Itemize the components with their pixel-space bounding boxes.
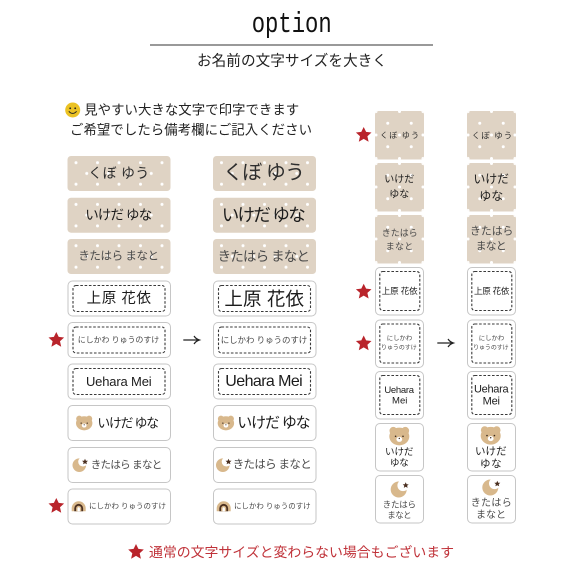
square: kubo yuu [375,111,424,160]
square: kitahara manato [375,215,424,264]
label: ikeda yuna large: いけだ ゆな [222,205,306,225]
square: Uehara Mei: Mei [392,396,407,406]
square: moon kitahara manato large: まなと [476,509,506,521]
star: rectangular row 5 [48,332,64,347]
label: nishikawa ryuunosuke: にしかわ りゅうのすけ [78,336,159,344]
square: Uehara Mei large: Mei [483,396,500,408]
label: rainbow nishikawa ryuunosuke: にしかわ りゅうのすけ [89,502,166,510]
square: kubo yuu large [467,111,516,160]
label: bear ikeda yuna large: いけだ ゆな [237,414,311,432]
square: uehara kai large: 上原 花依 [474,286,510,296]
label: ikeda yuna: いけだ ゆな [85,207,152,222]
label: uehara kai [68,281,170,316]
title: option [252,8,332,41]
instruction text: 見やすい大きな文字で印字できます [84,102,299,118]
square: nishikawa ryuunosuke large: りゅうのすけ [473,344,509,351]
label: bear ikeda yuna [68,406,170,440]
square: moon kitahara manato: きたはら [383,499,416,509]
square: kubo yuu: くぼ ゆう [380,131,419,140]
label: bear ikeda yuna large [214,406,316,440]
square: bear ikeda yuna large: ゆな [480,458,502,470]
square: Uehara Mei large: Uehara [474,383,510,395]
label: kitahara manato large: きたはら まなと [218,249,310,264]
panel: square labels, normal size [375,111,424,523]
label: moon kitahara manato large [214,448,316,482]
square: nishikawa ryuunosuke large [468,320,516,368]
label: nishikawa ryuunosuke [68,322,170,358]
square: bear ikeda yuna: ゆな [390,458,409,469]
label: ikeda yuna [68,198,170,233]
square: moon kitahara manato [376,476,424,523]
label: nishikawa ryuunosuke large: にしかわ りゅうのすけ [221,335,307,345]
subtitle: お名前の文字サイズを大きく [197,52,387,70]
square: kitahara manato: まなと [386,242,413,252]
panel: rectangular labels, normal size [68,156,170,524]
label: kitahara manato large [213,239,316,274]
square: bear ikeda yuna: いけだ [385,447,414,458]
label: rainbow nishikawa ryuunosuke large [214,489,316,524]
star: rectangular row 9 [48,498,64,513]
icon: smiley [65,102,80,118]
square: kitahara manato large [467,215,516,264]
label: Uehara Mei: Uehara Mei [86,374,152,389]
square: ikeda yuna: いけだ [384,174,414,186]
square: moon kitahara manato: まなと [387,510,412,520]
square: Uehara Mei [376,372,424,419]
star: square row 4 [356,284,372,298]
label: kubo yuu large [213,156,316,191]
label: Uehara Mei [68,364,170,399]
square: Uehara Mei: Uehara [384,385,415,396]
label: uehara kai: 上原 花依 [87,290,151,307]
square: ikeda yuna large [467,163,516,212]
square: nishikawa ryuunosuke: りゅうのすけ [381,344,417,351]
label: bear ikeda yuna: いけだ ゆな [97,416,159,430]
label: kubo yuu: くぼ ゆう [88,165,149,181]
label: Uehara Mei large: Uehara Mei [225,373,303,390]
instruction text [70,102,312,138]
square: nishikawa ryuunosuke large: にしかわ [479,334,504,342]
square: ikeda yuna large: ゆな [479,189,503,203]
square: kitahara manato large: きたはら [470,225,513,238]
label: ikeda yuna large [213,198,316,233]
label: kubo yuu large: くぼ ゆう [223,161,305,184]
panel: square labels, large size [467,111,516,523]
label: kitahara manato: きたはら まなと [78,250,159,263]
square: moon kitahara manato large: きたはら [471,497,512,509]
label: moon kitahara manato: きたはら まなと [91,459,162,471]
square: bear ikeda yuna [376,424,424,471]
label: rainbow nishikawa ryuunosuke [68,489,170,524]
instruction text: ご希望でしたら備考欄にご記入ください [70,122,312,138]
star: square row 5 [356,336,372,350]
label: uehara kai large: 上原 花依 [224,288,305,310]
square: bear ikeda yuna large [468,424,516,471]
square: ikeda yuna: ゆな [389,188,409,200]
footnote: 通常の文字サイズと変わらない場合もございます [149,544,454,560]
square: ikeda yuna [375,163,424,212]
square: uehara kai large [468,268,516,315]
arrow: rectangular [183,336,199,344]
star: square row 1 [356,127,372,142]
square: uehara kai: 上原 花依 [382,286,418,296]
arrow: square [437,339,453,347]
square: nishikawa ryuunosuke [376,320,424,368]
label: kubo yuu [68,156,170,191]
square: moon kitahara manato large [468,476,516,523]
label: moon kitahara manato [68,448,170,482]
label: kitahara manato [68,239,170,274]
square: Uehara Mei large [468,372,516,419]
square: nishikawa ryuunosuke: にしかわ [387,334,412,342]
square: kitahara manato: きたはら [382,228,418,238]
label: nishikawa ryuunosuke large [214,322,316,358]
label: Uehara Mei large [214,364,316,399]
square: ikeda yuna large: いけだ [473,172,509,186]
square: uehara kai [376,268,424,315]
square: bear ikeda yuna large: いけだ [475,446,507,458]
square: kitahara manato large: まなと [476,240,507,253]
square: kubo yuu large: くぼ ゆう [472,131,512,141]
label: uehara kai large [214,281,316,316]
label: rainbow nishikawa ryuunosuke large: にしかわ りゅうのすけ [234,502,311,510]
panel: rectangular labels, large size [213,156,316,524]
label: moon kitahara manato large: きたはら まなと [233,458,312,471]
